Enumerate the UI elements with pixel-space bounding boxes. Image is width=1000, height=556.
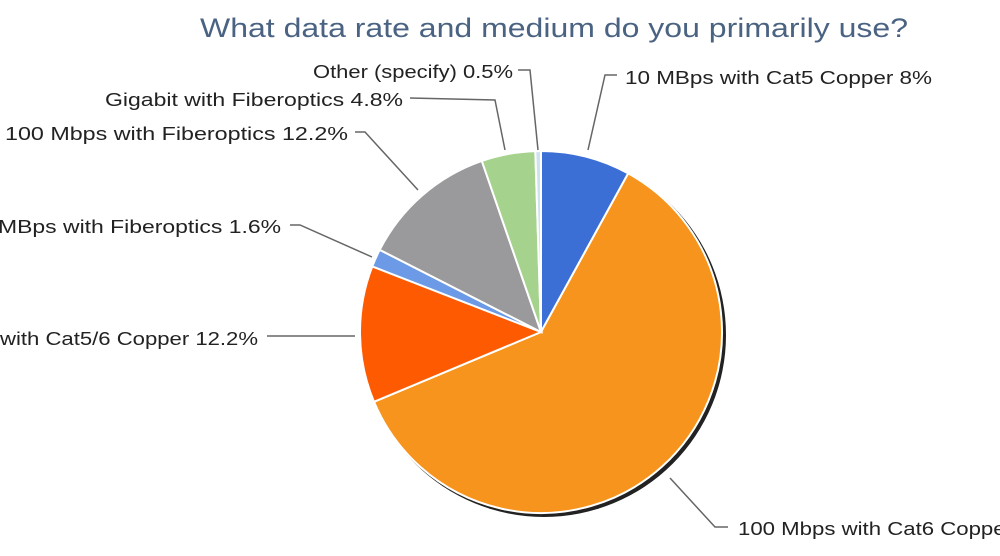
- labels: 10 MBps with Cat5 Copper 8%: [625, 68, 932, 88]
- labels: Other (specify) 0.5%: [313, 62, 513, 82]
- labels: 100 Mbps with Cat6 Copper: [738, 519, 1000, 539]
- title: What data rate and medium do you primarily use?: [200, 13, 908, 43]
- labels: with Cat5/6 Copper 12.2%: [0, 329, 258, 349]
- labels: Gigabit with Fiberoptics 4.8%: [105, 90, 403, 110]
- labels: MBps with Fiberoptics 1.6%: [0, 217, 281, 237]
- leader lines: [267, 70, 728, 527]
- pie chart: [360, 151, 726, 517]
- labels: 100 Mbps with Fiberoptics 12.2%: [5, 124, 348, 144]
